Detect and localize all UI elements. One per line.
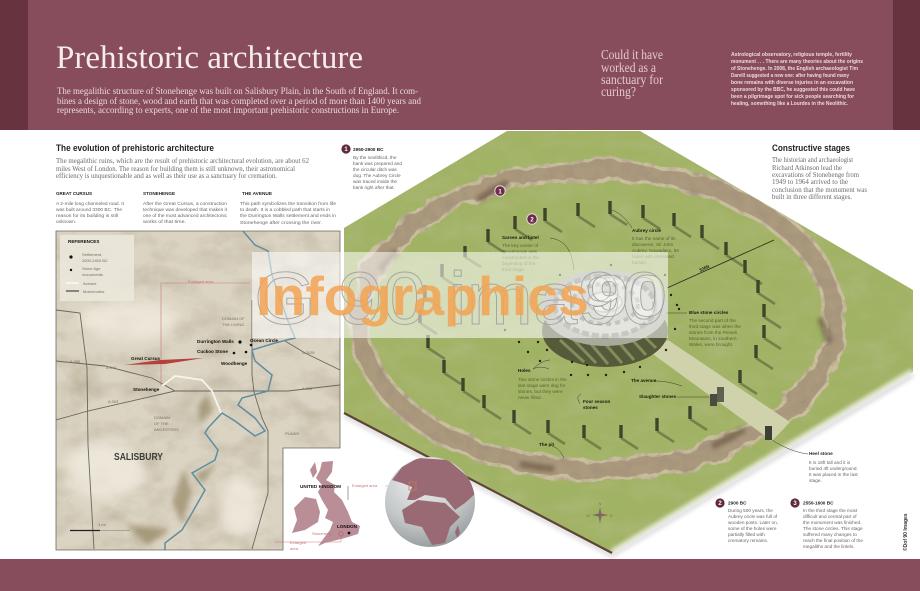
step marker 2	[527, 214, 537, 224]
soil edge	[344, 413, 612, 553]
label: blue stone circles: Mountains, in southern	[689, 336, 737, 341]
panel: isometric field	[344, 131, 914, 558]
column: The Avenue: This path symbolizes the transition from life	[240, 201, 336, 206]
map labels: THE LIVING	[222, 322, 244, 327]
enlarged frame	[161, 283, 250, 386]
map legend: monuments	[82, 272, 103, 277]
slaughter stones	[710, 387, 724, 406]
column: Stonehenge	[143, 191, 228, 224]
map labels: Woodhenge	[221, 361, 248, 366]
sidebar text: sponsored by the BBC, he suggested this could have	[731, 87, 855, 93]
label: aubrey circle	[632, 228, 679, 265]
sidebar text: of Stonehenge. In 2008, the English archaeologist Tim	[731, 66, 859, 72]
label: holes: last stage were dug for	[518, 383, 566, 388]
step 1 text: was traced inside the	[353, 179, 397, 184]
column: Stonehenge: STONEHENGE	[143, 191, 175, 196]
watermark: Infographics	[256, 265, 589, 327]
column: Great Cursus	[56, 191, 125, 224]
map labels: A 344	[106, 365, 117, 370]
column: Stonehenge: works of that time.	[143, 219, 186, 224]
label: aubrey circle: holes with cremated	[632, 254, 674, 259]
edge fade	[612, 372, 913, 553]
column: Great Cursus: was built around 3300 BC. The	[56, 207, 122, 212]
paragraph: constructive stages: built in three different stages.	[772, 192, 852, 201]
avenue path	[162, 376, 221, 413]
sidebar question: sanctuary for	[601, 72, 663, 87]
map labels: PLAINS	[285, 431, 300, 436]
label: sarsen and lintel: constructed in the	[502, 255, 539, 260]
map labels: A 303	[302, 386, 313, 391]
watermark: G 90 ima90	[254, 257, 666, 340]
heading: constructive stages: Constructive stages	[772, 143, 850, 153]
label: sarsen and lintel: third stage.	[502, 267, 525, 272]
paragraph: constructive stages: excavations of Stonehenge from	[772, 170, 859, 179]
paragraph: constructive stages: Richard Atkinson lead the	[772, 163, 843, 172]
step 2 text: crematory remains.	[728, 538, 768, 543]
paragraph: evolution: The megalithic ruins, which are the result of prehistoric architectural evolution, are about 62	[56, 156, 309, 165]
title: Prehistoric architecture	[56, 40, 363, 76]
label: holes: Holes	[518, 368, 531, 373]
sidebar text: been a pilgrimage spot for sick people searching for	[731, 94, 854, 100]
label: sarsen and lintel	[502, 235, 539, 272]
label: holes: stones, but they were	[518, 389, 563, 394]
step 3 text: difficult and central part of	[803, 514, 857, 519]
step 1 text: the circular ditch was	[353, 167, 397, 172]
column: Stonehenge: one of the most advanced architectonic	[143, 213, 228, 218]
column: Great Cursus: reason for its building is still	[56, 213, 118, 218]
inset: UK map: area	[290, 546, 299, 551]
step marker 1: 1	[498, 189, 502, 195]
inset: UK map: Enlarged area	[352, 483, 378, 488]
step 1 text: dug. The Aubrey Circle	[353, 173, 401, 178]
step 3 text: The stone circles. This stage	[803, 526, 863, 531]
inset: UK map: Enlarged	[290, 540, 306, 545]
map labels: OF THE	[154, 421, 169, 426]
scale bar	[70, 522, 130, 530]
grass	[344, 131, 913, 553]
map labels: Durrington Walls	[197, 339, 234, 344]
label: aubrey circle: discoverer, Sir John	[632, 242, 674, 247]
label: holes	[518, 368, 567, 400]
avenue	[650, 340, 790, 441]
column: Great Cursus: unknown.	[56, 219, 76, 224]
label: four season stones	[583, 399, 611, 410]
bank	[359, 170, 913, 553]
scale bar: 1 mi	[98, 522, 106, 527]
paragraph: evolution: efficiency is unquestionable and as well as their use as a sanctuary for cremation.	[56, 171, 277, 180]
step 1 text: bank was prepared and	[353, 161, 402, 166]
label: sarsen and lintel: Sarsen and lintel	[502, 235, 539, 240]
step 2 text: some of the holes were	[728, 526, 777, 531]
step 2 text: During 500 years, the	[728, 508, 773, 513]
map labels: A 303	[108, 399, 119, 404]
intro text	[57, 86, 421, 116]
ditch shadows	[380, 183, 829, 469]
map labels: Cuckoo Stone	[197, 349, 228, 354]
step marker 2: 2	[530, 217, 534, 223]
icon: compass	[586, 501, 613, 524]
watermark: 90	[590, 264, 667, 329]
label: four season stones: stones	[583, 405, 598, 410]
map labels: Stonehenge	[133, 387, 160, 392]
label: aubrey circle: Aubrey. Nowadays, 56	[632, 248, 679, 253]
label: sarsen and lintel: Stonehenge was	[502, 249, 538, 254]
map legend	[60, 235, 134, 301]
ditch ring	[359, 170, 835, 470]
icon: compass: N	[598, 501, 602, 506]
map legend: 2600-2400 BC	[82, 258, 108, 263]
step 3 text: suffered many changes to	[803, 532, 857, 537]
label: blue stone circles: Blue stone circles	[689, 310, 729, 315]
intro text: The megalithic structure of Stonehenge was built on Salisbury Plain, in the South of England. It com-	[57, 86, 418, 97]
great cursus	[124, 358, 204, 365]
map labels: DOMAIN OF	[222, 316, 245, 321]
step 3 text: reach the final position of the	[803, 538, 863, 543]
column: The Avenue: to death. It is a cobbled path that starts in	[240, 207, 330, 212]
heel stone	[765, 426, 772, 440]
label: the pit: The pit	[539, 442, 555, 447]
label: the avenue: The avenue	[631, 378, 657, 383]
sidebar text	[731, 52, 863, 107]
heading: evolution: The evolution of prehistoric architecture	[56, 143, 214, 153]
step 2 text: wooden posts. Later on,	[728, 520, 778, 525]
map legend: Motorroutes	[83, 289, 104, 294]
label: slaughter stones: Slaughter stones	[639, 394, 677, 399]
posts	[420, 201, 781, 449]
column: The Avenue: the Durrington Walls settlement and ends in	[240, 213, 336, 218]
sidebar text: bone remains with diverse injuries in an excavation	[731, 80, 853, 86]
step marker 1	[495, 186, 505, 196]
measure line: 326ft	[698, 264, 711, 273]
step 1 text: 1	[344, 147, 348, 153]
label: aubrey circle: It has the name of its	[632, 236, 676, 241]
monument	[542, 270, 668, 367]
sidebar question	[601, 47, 663, 99]
sidebar question: worked as a	[601, 60, 656, 75]
step 1 text	[341, 144, 402, 190]
inset: UK map	[275, 461, 408, 551]
label: blue stone circles: The second part of the	[689, 318, 736, 323]
step 2 text	[715, 498, 778, 543]
map labels: Enlarged area	[188, 279, 214, 284]
label: heel stone: It was placed in the last	[809, 472, 858, 477]
map labels: SALISBURY	[114, 452, 163, 463]
step 3 text: 3	[793, 501, 797, 507]
column: The Avenue	[240, 191, 336, 225]
sidebar question: Could it have	[601, 47, 663, 62]
map labels: Ocean Circle	[250, 338, 279, 343]
label: blue stone circles	[689, 310, 741, 347]
step 3 text	[790, 498, 863, 549]
icon: compass: W	[586, 513, 590, 518]
step 1 text: 2950-2900 BC	[353, 147, 384, 152]
label: heel stone	[809, 451, 858, 483]
label: aubrey circle: Aubrey circle	[632, 228, 662, 233]
map legend: Settlement,	[82, 252, 102, 257]
column: Stonehenge: technique was developed that makes it	[143, 207, 228, 212]
column: Great Cursus: A 2-mile long channeled road. It	[56, 201, 125, 206]
label: holes: never filled.	[518, 395, 542, 400]
label: blue stone circles: third stage was when the	[689, 324, 741, 329]
step 2 text: Aubrey circle was full of	[728, 514, 778, 519]
column: Great Cursus: GREAT CURSUS	[56, 191, 92, 196]
credit: ©Dof 90 Images	[902, 513, 909, 551]
paragraph: constructive stages: The historian and archaeologist	[772, 155, 854, 164]
map labels: DOMAIN	[154, 415, 170, 420]
paragraph: constructive stages: conclusion that the monument was	[772, 185, 867, 194]
sidebar text: Astrological observatory, religious temple, fertility	[731, 52, 852, 58]
holes	[504, 264, 680, 376]
intro text: bines a design of stone, wood and earth that was completed over a period of more than 1400 years and	[57, 96, 421, 107]
paragraph: constructive stages	[772, 155, 867, 201]
inset: UK map: Stonehenge	[312, 531, 334, 536]
sidebar question: curing?	[601, 84, 636, 99]
step 3 text: the monument was finished.	[803, 520, 861, 525]
inset: UK map: LONDON	[337, 524, 358, 529]
measure line	[667, 240, 774, 288]
label: heel stone: buried 4ft underground.	[809, 466, 858, 471]
map legend: REFERENCES	[68, 239, 99, 244]
label: four season stones: Four season	[583, 399, 611, 404]
map labels	[70, 279, 315, 530]
step 1 text: By the neolithicd, the	[353, 155, 397, 160]
paragraph: evolution: miles West of London. The reason for building them is still unknown, their astronomical	[56, 164, 295, 173]
intro text: represents, according to experts, one of the most important prehistoric constructions in Europe.	[57, 105, 399, 116]
step 3 text: megaliths and the lintels.	[803, 544, 855, 549]
field shadow	[344, 372, 913, 558]
column: The Avenue: Stonehenge after crossing the river.	[240, 220, 322, 225]
river	[165, 231, 295, 550]
label: heel stone: Heel stone	[809, 451, 833, 456]
panel: locator map	[56, 231, 340, 550]
header band	[0, 0, 920, 130]
step 3 text: 2550-1600 BC	[803, 500, 834, 506]
column: The Avenue: THE AVENUE	[242, 191, 272, 196]
step 2 text: 2	[718, 501, 722, 507]
terrain	[56, 231, 340, 550]
label: blue stone circles: Wales, were brought.	[689, 342, 733, 347]
map labels: ANCESTORS	[154, 427, 179, 432]
map labels: A 3028	[302, 350, 315, 355]
step 1 text: bank right after that.	[353, 185, 395, 190]
sidebar text: monument . . . There are many theories about the origins	[731, 59, 863, 65]
sidebar text: Darvill suggested a new one: after having found many	[731, 73, 849, 79]
sidebar text: healing, something like a Lourdes in the Neolithic.	[731, 101, 849, 107]
label: holes: Two stone circles in the	[518, 377, 567, 382]
label: blue stone circles: stones from the Preseli	[689, 330, 737, 335]
roads	[56, 300, 340, 549]
paragraph: evolution	[56, 156, 309, 180]
inset: UK map: UNITED KINGDOM	[300, 484, 341, 489]
label: aubrey circle: burials.	[632, 260, 647, 265]
paragraph: constructive stages: 1949 to 1964 arrived to the	[772, 177, 849, 186]
map labels: A 360	[70, 359, 81, 364]
footer band	[0, 559, 920, 591]
label: heel stone: It is 16ft tall and it is	[809, 460, 851, 465]
icon: compass: E	[610, 513, 613, 518]
label: sarsen and lintel: beginning of the	[502, 261, 536, 266]
map labels: Great Cursus	[131, 356, 161, 361]
column: Stonehenge: After the Great Cursus, a construction	[143, 201, 227, 206]
leader lines	[533, 210, 808, 458]
map legend: Avenue	[83, 281, 97, 286]
step 3 text: In the third stage the most	[803, 508, 858, 513]
step 2 text: partially filled with	[728, 532, 765, 537]
map legend: Stone Age	[82, 266, 101, 271]
label: sarsen and lintel: The key center of	[502, 243, 539, 248]
label: heel stone: stage.	[809, 478, 822, 483]
icon: globe	[385, 457, 476, 547]
step 2 text: 2900 BC	[728, 500, 747, 506]
